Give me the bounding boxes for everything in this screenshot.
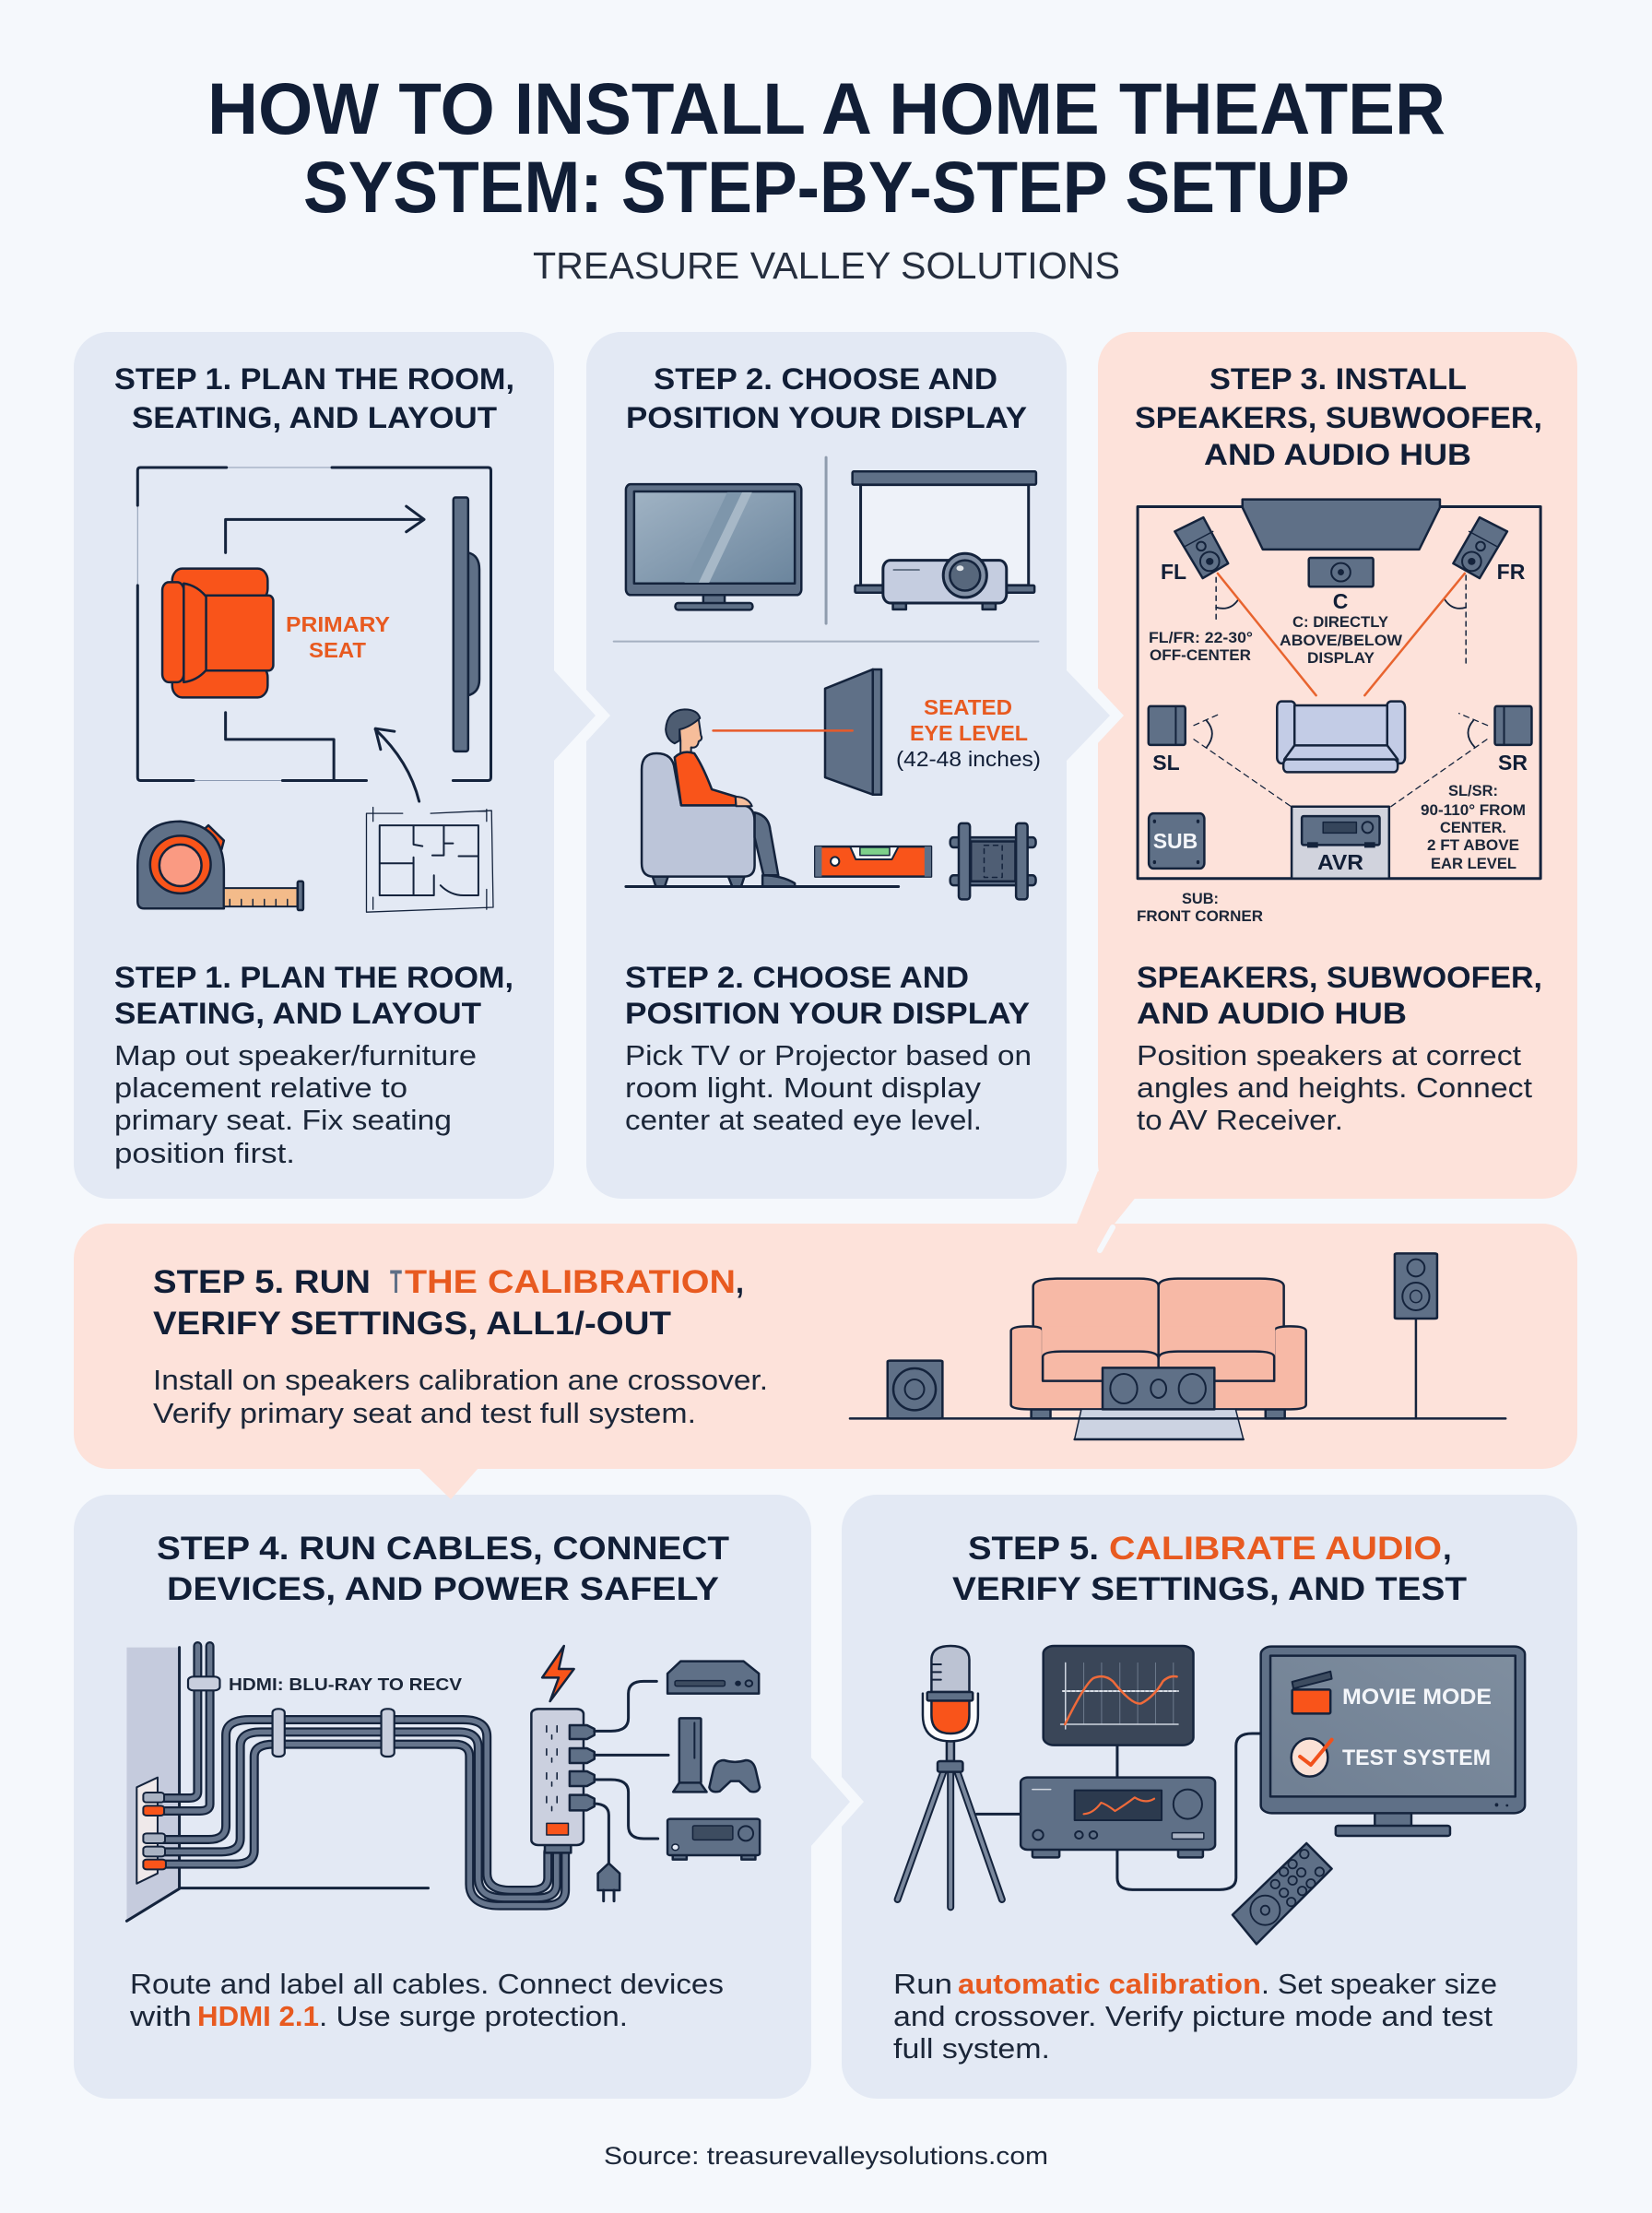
icon: display top view — [1243, 500, 1440, 550]
heading: step 4 — [157, 1531, 729, 1607]
calibration illustration — [898, 1646, 1525, 1944]
body text: step 3: angles and heights. Connect — [1137, 1071, 1532, 1104]
icon: receiver — [667, 1819, 760, 1860]
heading: step 1 — [114, 362, 514, 434]
body text: step 1: position first. — [114, 1137, 295, 1169]
body text: banner: Verify primary seat and test full system. — [153, 1397, 696, 1429]
screen labels: TEST SYSTEM — [1342, 1746, 1491, 1770]
subheading: step 1: STEP 1. PLAN THE ROOM, — [114, 961, 513, 994]
icon: check mark — [1292, 1738, 1332, 1777]
heading: banner: T — [390, 1264, 402, 1300]
icon: sofa — [1011, 1279, 1306, 1418]
icon: subwoofer — [1149, 813, 1204, 869]
icon: surround speakers — [1149, 706, 1531, 745]
placement notes — [1137, 613, 1526, 925]
subheading: step 2: POSITION YOUR DISPLAY — [625, 997, 1030, 1030]
speaker labels: SL — [1152, 751, 1180, 775]
panel: banner run the calibration — [153, 1253, 1505, 1439]
heading: banner: THE CALIBRATION — [405, 1264, 736, 1300]
icon: primary seat — [162, 569, 273, 697]
speaker labels: AVR — [1317, 850, 1363, 874]
subheading: step 3: SPEAKERS, SUBWOOFER, — [1137, 961, 1542, 994]
body text: step 5: . Set speaker size — [1261, 1968, 1497, 2000]
speaker labels: C — [1333, 589, 1348, 613]
body text: step 4 — [129, 1968, 724, 2032]
screen labels: MOVIE MODE — [1342, 1685, 1492, 1710]
body text: step 3: Position speakers at correct — [1137, 1039, 1521, 1071]
icon: spirit level — [815, 846, 931, 877]
body text: step 2: room light. Mount display — [625, 1071, 982, 1104]
placement notes: 90-110° FROM — [1421, 801, 1526, 819]
title: HOW TO INSTALL A HOME THEATER — [207, 67, 1446, 149]
icon: calibration microphone on tripod — [898, 1646, 1002, 1907]
body text: step 2: Pick TV or Projector based on — [625, 1039, 1032, 1071]
body text: step 3 — [1137, 1039, 1532, 1136]
icon: power bolt — [542, 1646, 574, 1701]
heading: step 1: STEP 1. PLAN THE ROOM, — [114, 362, 514, 396]
screen labels — [1342, 1685, 1492, 1770]
icon: game console and controller — [673, 1718, 760, 1792]
cable clips — [188, 1676, 395, 1757]
heading: banner: VERIFY SETTINGS, ALL1/-OUT — [153, 1306, 671, 1342]
icon: projector and screen — [853, 471, 1036, 609]
body text: step 2: center at seated eye level. — [625, 1104, 982, 1136]
panel: step 1 plan the room — [114, 362, 514, 1169]
heading: step 1: SEATING, AND LAYOUT — [132, 401, 497, 434]
floor line — [850, 1417, 1505, 1420]
icon: front right speaker — [1453, 517, 1507, 578]
label: seated eye level: EYE LEVEL — [910, 721, 1028, 745]
icon: wall display side view — [825, 669, 881, 795]
icon: television with menu — [1261, 1647, 1525, 1836]
icon: sofa top view — [1277, 702, 1405, 772]
icon: av receiver — [1292, 807, 1389, 879]
title: SYSTEM: STEP-BY-STEP SETUP — [303, 146, 1350, 228]
icon: floor standing speaker — [1395, 1253, 1437, 1418]
icon: wall mount bracket — [950, 823, 1036, 899]
body text: step 1: placement relative to — [114, 1071, 407, 1104]
arrow: step 4 to step 5 — [810, 1743, 864, 1861]
icon: surge protector — [531, 1709, 595, 1852]
speaker labels — [1152, 560, 1528, 874]
heading: step 5 — [952, 1531, 1467, 1607]
cable routing illustration — [126, 1646, 760, 1921]
icon: seated viewer in armchair — [626, 709, 899, 886]
speaker labels: FL — [1161, 560, 1186, 584]
body text: banner — [153, 1364, 768, 1429]
icon: wall display — [454, 497, 479, 751]
heading: banner — [153, 1264, 744, 1342]
label: seated eye level — [896, 695, 1041, 771]
heading: step 4: DEVICES, AND POWER SAFELY — [167, 1571, 719, 1607]
heading: step 2: POSITION YOUR DISPLAY — [626, 401, 1027, 434]
title — [207, 67, 1446, 228]
icon: remote control — [1233, 1843, 1332, 1944]
arrow: step 2 to step 3 — [1066, 655, 1124, 776]
icon: av receiver — [1021, 1778, 1215, 1857]
heading: step 5: VERIFY SETTINGS, AND TEST — [952, 1571, 1467, 1607]
living room illustration — [850, 1253, 1505, 1439]
body text: banner: Install on speakers calibration ane crossover. — [153, 1364, 768, 1396]
placement notes: FRONT CORNER — [1137, 907, 1263, 925]
speaker labels: FR — [1497, 560, 1526, 584]
icon: media stand — [1075, 1409, 1244, 1439]
placement notes: SL/SR: — [1448, 782, 1498, 799]
body text: step 4: HDMI 2.1 — [197, 2000, 319, 2032]
placement notes: ABOVE/BELOW — [1280, 632, 1403, 649]
placement notes: DISPLAY — [1307, 649, 1375, 667]
placement notes: OFF-CENTER — [1150, 646, 1251, 664]
body text: step 5: Run — [893, 1968, 952, 2000]
body text: step 5: full system. — [893, 2032, 1050, 2065]
label: seated eye level: (42-48 inches) — [896, 747, 1041, 771]
icon: frequency response monitor — [1044, 1646, 1194, 1746]
arrow: banner to step 4 — [419, 1468, 478, 1499]
icon: television — [626, 484, 801, 609]
subtitle: TREASURE VALLEY SOLUTIONS — [533, 244, 1120, 287]
subheading: step 2 — [625, 961, 1030, 1030]
body text: step 5: and crossover. Verify picture mode and test — [893, 2000, 1493, 2032]
body text: step 5: automatic calibration — [958, 1968, 1261, 2000]
body text: step 3: to AV Receiver. — [1137, 1104, 1343, 1136]
heading: step 4: STEP 4. RUN CABLES, CONNECT — [157, 1531, 729, 1567]
heading: step 5: , — [1443, 1531, 1452, 1567]
icon: clapperboard — [1292, 1672, 1332, 1713]
placement notes: C: DIRECTLY — [1292, 613, 1389, 631]
panel backgrounds — [74, 332, 1577, 2099]
eye level line — [714, 729, 853, 732]
icon: subwoofer — [888, 1361, 942, 1418]
heading: banner: , — [736, 1264, 744, 1300]
heading: step 5: CALIBRATE AUDIO — [1109, 1531, 1442, 1567]
label: primary seat: SEAT — [309, 638, 366, 662]
icon: front left speaker — [1174, 517, 1228, 578]
body text: step 1 — [114, 1039, 477, 1169]
placement notes: EAR LEVEL — [1431, 855, 1516, 872]
placement notes: FL/FR: 22-30° — [1149, 629, 1253, 646]
wall and floor — [126, 1648, 429, 1921]
speaker labels: SR — [1498, 751, 1528, 775]
subheading: step 3 — [1137, 961, 1542, 1030]
body text: step 1: primary seat. Fix seating — [114, 1104, 452, 1136]
device cables and plug — [595, 1681, 668, 1901]
room plan diagram — [137, 467, 493, 912]
subheading: step 1: SEATING, AND LAYOUT — [114, 997, 481, 1030]
cables — [163, 1646, 565, 1906]
label: primary seat — [286, 612, 390, 662]
panel: step 4 cables — [126, 1531, 760, 2032]
subheading: step 2: STEP 2. CHOOSE AND — [625, 961, 969, 994]
placement notes: 2 FT ABOVE — [1427, 836, 1519, 854]
arrow: step 1 to step 2 — [553, 655, 610, 776]
connecting cables — [976, 1734, 1261, 1889]
heading: step 3: SPEAKERS, SUBWOOFER, — [1135, 401, 1542, 434]
icon: floor plan sketch — [366, 808, 493, 912]
heading: step 2 — [626, 362, 1027, 434]
body text: step 4: Route and label all cables. Connect devices — [130, 1968, 724, 2000]
icon: center speaker — [1309, 558, 1374, 586]
label: primary seat: PRIMARY — [286, 612, 390, 636]
heading: step 2: STEP 2. CHOOSE AND — [654, 362, 997, 396]
label: hdmi: HDMI: BLU-RAY TO RECV — [229, 1675, 462, 1694]
placement notes: SUB: — [1182, 890, 1219, 907]
speaker placement diagram — [1137, 500, 1540, 925]
subheading: step 3: AND AUDIO HUB — [1137, 997, 1407, 1030]
panel: step 5 calibrate — [893, 1531, 1525, 2065]
placement notes: CENTER. — [1440, 819, 1506, 836]
wall connectors — [143, 1793, 166, 1869]
body text: step 5 — [893, 1968, 1497, 2065]
heading: step 3: AND AUDIO HUB — [1204, 438, 1471, 471]
label: seated eye level: SEATED — [924, 695, 1012, 719]
body text: step 4: . Use surge protection. — [319, 2000, 628, 2032]
display illustrations — [614, 457, 1041, 899]
subheading: step 1 — [114, 961, 513, 1030]
heading: banner: STEP 5. RUN — [153, 1264, 371, 1300]
icon: tape measure — [137, 822, 303, 910]
panel: step 3 speakers — [1135, 362, 1542, 1136]
heading: step 5: STEP 5. — [968, 1531, 1099, 1567]
icon: blu-ray player — [667, 1662, 759, 1694]
source line: Source: treasurevalleysolutions.com — [604, 2142, 1048, 2170]
heading: step 3 — [1135, 362, 1542, 471]
heading: step 3: STEP 3. INSTALL — [1210, 362, 1467, 396]
speaker labels: SUB — [1153, 829, 1198, 853]
body text: step 1: Map out speaker/furniture — [114, 1039, 477, 1071]
panel: step 2 choose display — [614, 362, 1041, 1136]
body text: step 4: with — [129, 2000, 192, 2032]
icon: center speaker — [1103, 1367, 1214, 1409]
body text: step 2 — [625, 1039, 1032, 1136]
